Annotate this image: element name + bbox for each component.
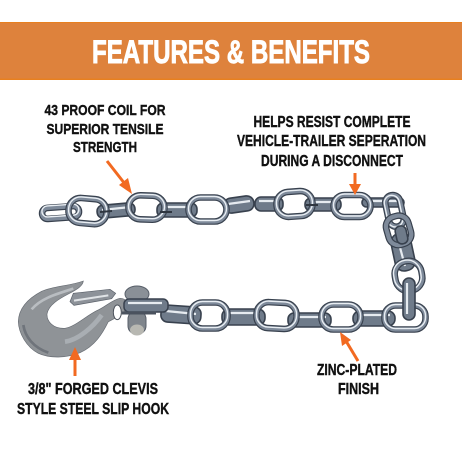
callout text: 43 proof coil: SUPERIOR TENSILE	[46, 121, 164, 138]
hook latch	[70, 289, 116, 305]
callout text: 43 proof coil: 43 PROOF COIL FOR	[44, 102, 166, 119]
callout text: forged clevis hook: 3/8" FORGED CLEVIS	[28, 381, 158, 398]
title: FEATURES & BENEFITS	[92, 34, 370, 70]
hook eye	[113, 305, 121, 320]
callout text: helps resist separation	[237, 114, 426, 170]
clevis shackle	[122, 286, 168, 336]
callout text: zinc-plated finish: ZINC-PLATED	[317, 362, 397, 379]
slip hook	[18, 281, 127, 357]
chain: top run	[42, 189, 404, 225]
arrow: slip hook	[69, 347, 81, 376]
header band	[0, 22, 462, 80]
callout text: zinc-plated finish: FINISH	[338, 381, 379, 398]
callout text: helps resist separation: DURING A DISCONNECT	[261, 153, 403, 170]
chain: right vertical run	[383, 194, 424, 293]
arrow: proof coil	[107, 161, 132, 194]
callout text: 43 proof coil	[44, 102, 166, 156]
arrow: zinc-plated	[340, 332, 358, 361]
callout text: 43 proof coil: STRENGTH	[73, 139, 137, 156]
chain: bottom run	[160, 278, 426, 330]
callout text: zinc-plated finish	[317, 362, 397, 398]
arrow: separation	[349, 173, 361, 195]
hook body	[18, 281, 127, 357]
callout text: forged clevis hook: STYLE STEEL SLIP HOOK	[17, 401, 170, 418]
callout text: helps resist separation: HELPS RESIST COMPLETE	[254, 114, 410, 131]
callout text: forged clevis hook	[17, 381, 170, 418]
